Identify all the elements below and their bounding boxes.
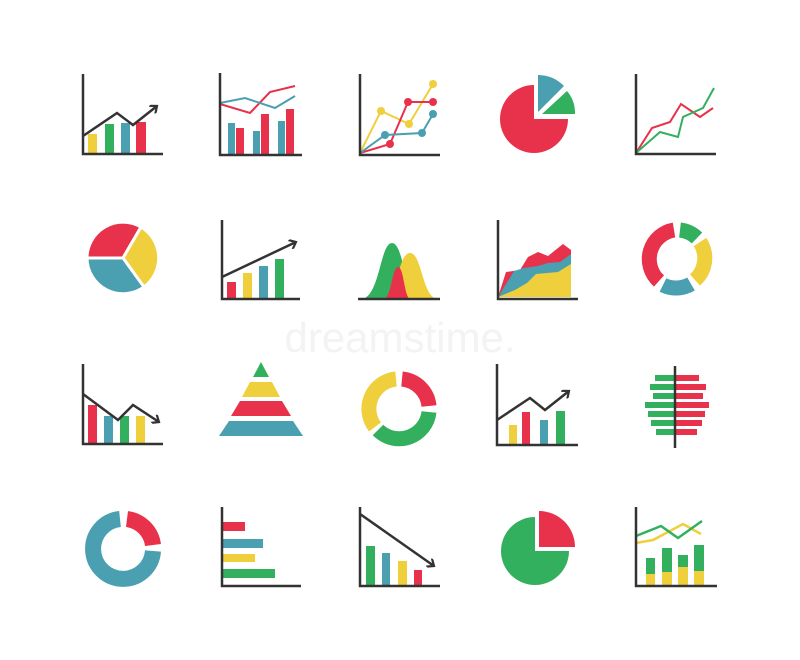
icon: two line chart <box>636 74 716 154</box>
icon: two-segment donut <box>93 519 153 579</box>
icon: pie with red wedge <box>501 511 575 585</box>
icon: pyramid <box>219 362 303 436</box>
icon: declining bars <box>83 364 163 444</box>
watermark: dreamstime. <box>284 314 516 361</box>
icon: exploded pie <box>500 75 575 153</box>
icon: three-segment donut <box>369 379 429 439</box>
icon: bar chart up arrow <box>83 74 163 154</box>
icon: dotted line chart <box>360 74 440 155</box>
icon: stacked area <box>498 220 578 299</box>
icon: horizontal bars <box>222 507 301 586</box>
icon: bars with zigzag arrow <box>497 364 578 445</box>
icon: butterfly chart <box>645 366 709 448</box>
icon: grouped bars with lines <box>220 73 302 155</box>
icon: four-segment donut <box>649 230 705 288</box>
icon: growth bars arrow <box>222 220 300 299</box>
icon: stacked bars with lines <box>636 507 717 586</box>
icon: declining bars arrow <box>360 507 440 586</box>
icon: bell curves <box>358 243 440 299</box>
icon: three-slice pie <box>87 222 159 294</box>
